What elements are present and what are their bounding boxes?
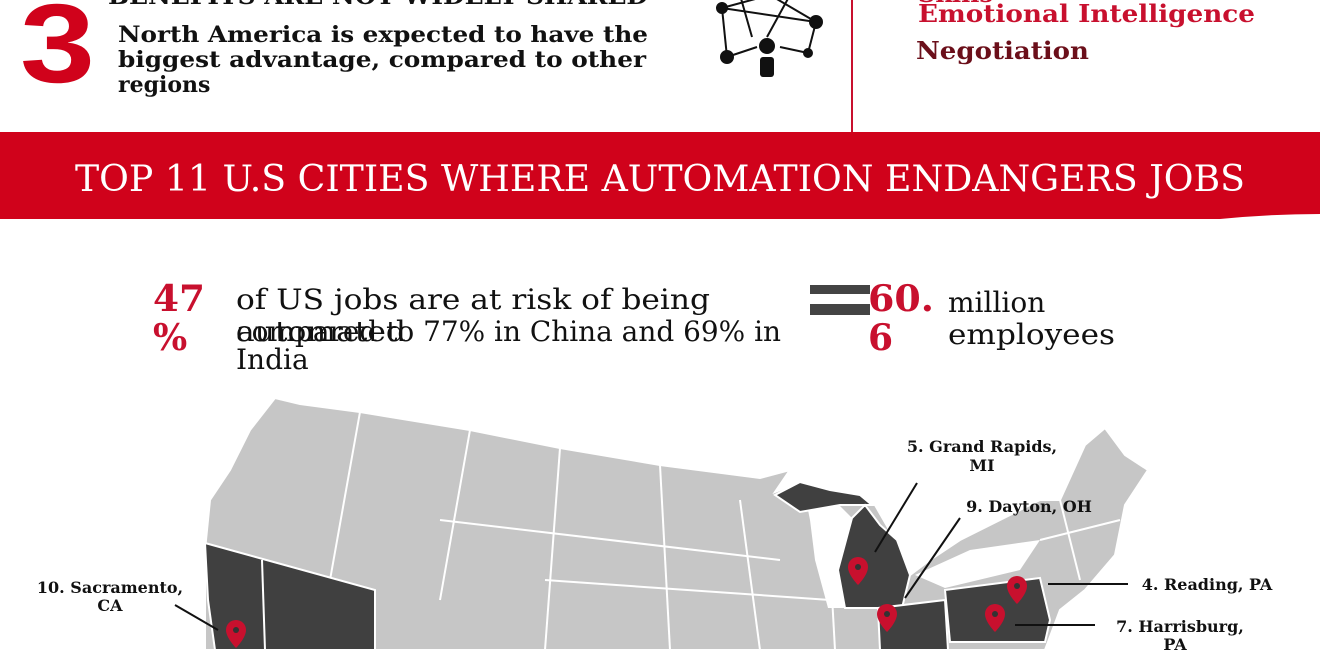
panel: benefit 3 — [20, 0, 648, 106]
map: highlighted states — [205, 482, 1050, 650]
panel: skills list — [916, 0, 1255, 65]
icon: network person — [717, 0, 822, 77]
stat: 47 percent — [153, 278, 781, 376]
pins and labels: CA — [97, 596, 123, 615]
stat: 60.6 million: 6 — [868, 317, 893, 359]
pins and labels: MI — [969, 456, 995, 475]
icon: equals — [810, 285, 870, 315]
stat: 60.6 million: employees — [948, 318, 1115, 351]
divider line — [851, 0, 853, 132]
pins and labels: 5. Grand Rapids, — [907, 437, 1057, 456]
text block: north america: North America is expected to have the — [118, 22, 648, 48]
pins and labels: 9. Dayton, OH — [966, 497, 1092, 516]
map: US states — [205, 398, 1148, 650]
pins and labels: 4. Reading, PA — [1142, 575, 1273, 594]
pins and labels — [37, 437, 1273, 650]
text block: north america — [118, 22, 648, 98]
stat: 47 percent: India — [236, 343, 309, 376]
stat: 47 percent: 47 — [153, 278, 205, 320]
stat: 60.6 million — [810, 278, 1115, 359]
stat: 60.6 million: 60. — [868, 278, 934, 320]
stat: 47 percent: of US jobs are at risk of being — [236, 283, 710, 316]
stat: 47 percent: % — [153, 317, 187, 359]
pins and labels: 7. Harrisburg, — [1116, 617, 1244, 636]
stat: 47 percent: automated — [236, 315, 406, 348]
title banner: TOP 11 U.S CITIES WHERE AUTOMATION ENDANGERS JOBS — [75, 159, 1245, 200]
text block: north america: regions — [118, 72, 210, 98]
stat: 60.6 million: million — [948, 286, 1045, 319]
text block: north america: biggest advantage, compared to other — [118, 47, 646, 73]
stat: 47 percent: compared to 77% in China and 69% in — [236, 315, 781, 348]
panel: skills list: Negotiation — [916, 36, 1089, 65]
title banner — [0, 132, 1320, 219]
pins and labels: 10. Sacramento, — [37, 578, 183, 597]
